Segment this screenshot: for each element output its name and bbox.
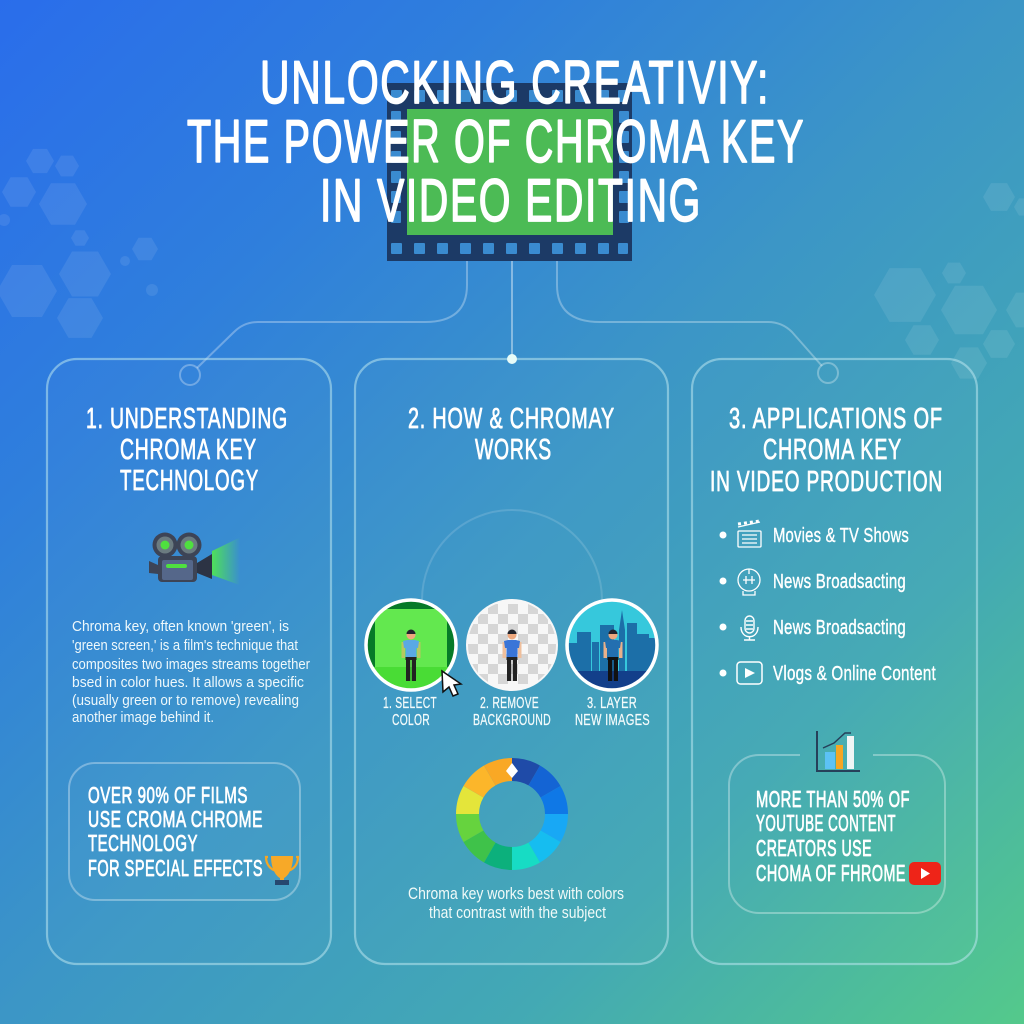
list item: news: News Broadsacting [773,570,906,593]
text block: chroma key definition: 'green screen,' is a film's technique that [72,637,299,654]
film frame icon [387,83,632,261]
text block: chroma key definition: Chroma key, often known 'green', is [72,618,289,635]
callout: youtube statistic: CREATORS USE [756,835,872,861]
title [187,49,805,234]
title: UNLOCKING CREATIVIY: [260,49,770,116]
heading: panel 2: WORKS [475,434,552,466]
text block: chroma key definition: bsed in color hues. It allows a specific [72,674,304,691]
list item: vlogs [720,662,936,685]
text block: chroma key definition: another image behind it. [72,709,214,726]
callout: youtube statistic [729,731,945,913]
step 2: remove background: BACKGROUND [473,712,551,729]
icon: cursor [442,671,461,696]
callout: films statistic: OVER 90% OF FILMS [88,782,248,808]
step 1: select color [365,599,461,729]
panel: how chroma key works [355,359,668,964]
list item: movies: Movies & TV Shows [773,524,909,547]
text block: chroma key definition: (usually green or to remove) revealing [72,692,299,709]
heading: panel 1 [86,403,288,497]
list item: broadcasting [720,616,906,640]
icon: microphone [741,616,758,640]
icon: clapperboard [738,521,761,547]
text block: chroma key definition [72,618,310,726]
center connector dot [507,354,517,364]
step 3: layer new images [566,599,658,729]
callout: films statistic [69,763,300,900]
icon: trophy [266,856,298,885]
caption: color tip: that contrast with the subject [429,903,606,922]
connector lines [180,261,838,385]
heading: panel 2 [408,403,615,466]
heading: panel 3: CHROMA KEY [763,434,902,466]
color wheel [468,763,556,858]
panel: understanding chroma key [47,359,331,964]
person [402,630,420,681]
callout: youtube statistic: CHOMA OF FHROME [756,860,906,886]
person [502,630,522,681]
caption: color tip: Chroma key works best with colors [408,884,624,903]
heading: panel 1: TECHNOLOGY [120,465,259,497]
step 3: layer new images: 3. LAYER [587,695,637,712]
heading: panel 2: 2. HOW & CHROMAY [408,403,615,435]
icon: play button [737,662,762,684]
person [604,630,622,681]
callout: youtube statistic: YOUTUBE CONTENT [756,810,896,836]
callout: films statistic: USE CROMA CHROME [88,806,263,832]
title: IN VIDEO EDITING [320,167,702,234]
caption: color tip [408,884,624,922]
step 1: select color: COLOR [392,712,430,729]
decorative hexagons left [0,149,158,338]
callout: films statistic: FOR SPECIAL EFFECTS [88,855,263,881]
list item: vlogs: Vlogs & Online Content [773,662,936,685]
icon: video camera [149,532,245,587]
panel: applications [692,359,977,964]
list item: movies [720,521,909,547]
text block: chroma key definition: composites two images streams together [72,656,310,673]
icon: globe [738,569,760,595]
step 2: remove background: 2. REMOVE [480,695,539,712]
callout: youtube statistic: MORE THAN 50% OF [756,786,910,812]
callout: films statistic: TECHNOLOGY [88,830,198,856]
heading: panel 1: 1. UNDERSTANDING [86,403,288,435]
icon: bar chart [817,731,860,771]
step 2: remove background [466,599,558,729]
step 1: select color: 1. SELECT [383,695,437,712]
step 3: layer new images: NEW IMAGES [575,712,650,729]
heading: panel 3 [710,403,943,498]
icon: youtube logo [909,862,941,885]
decorative hexagons right [874,183,1024,379]
list item: broadcasting: News Broadsacting [773,616,906,639]
list item: news [720,569,906,595]
heading: panel 1: CHROMA KEY [120,434,257,466]
